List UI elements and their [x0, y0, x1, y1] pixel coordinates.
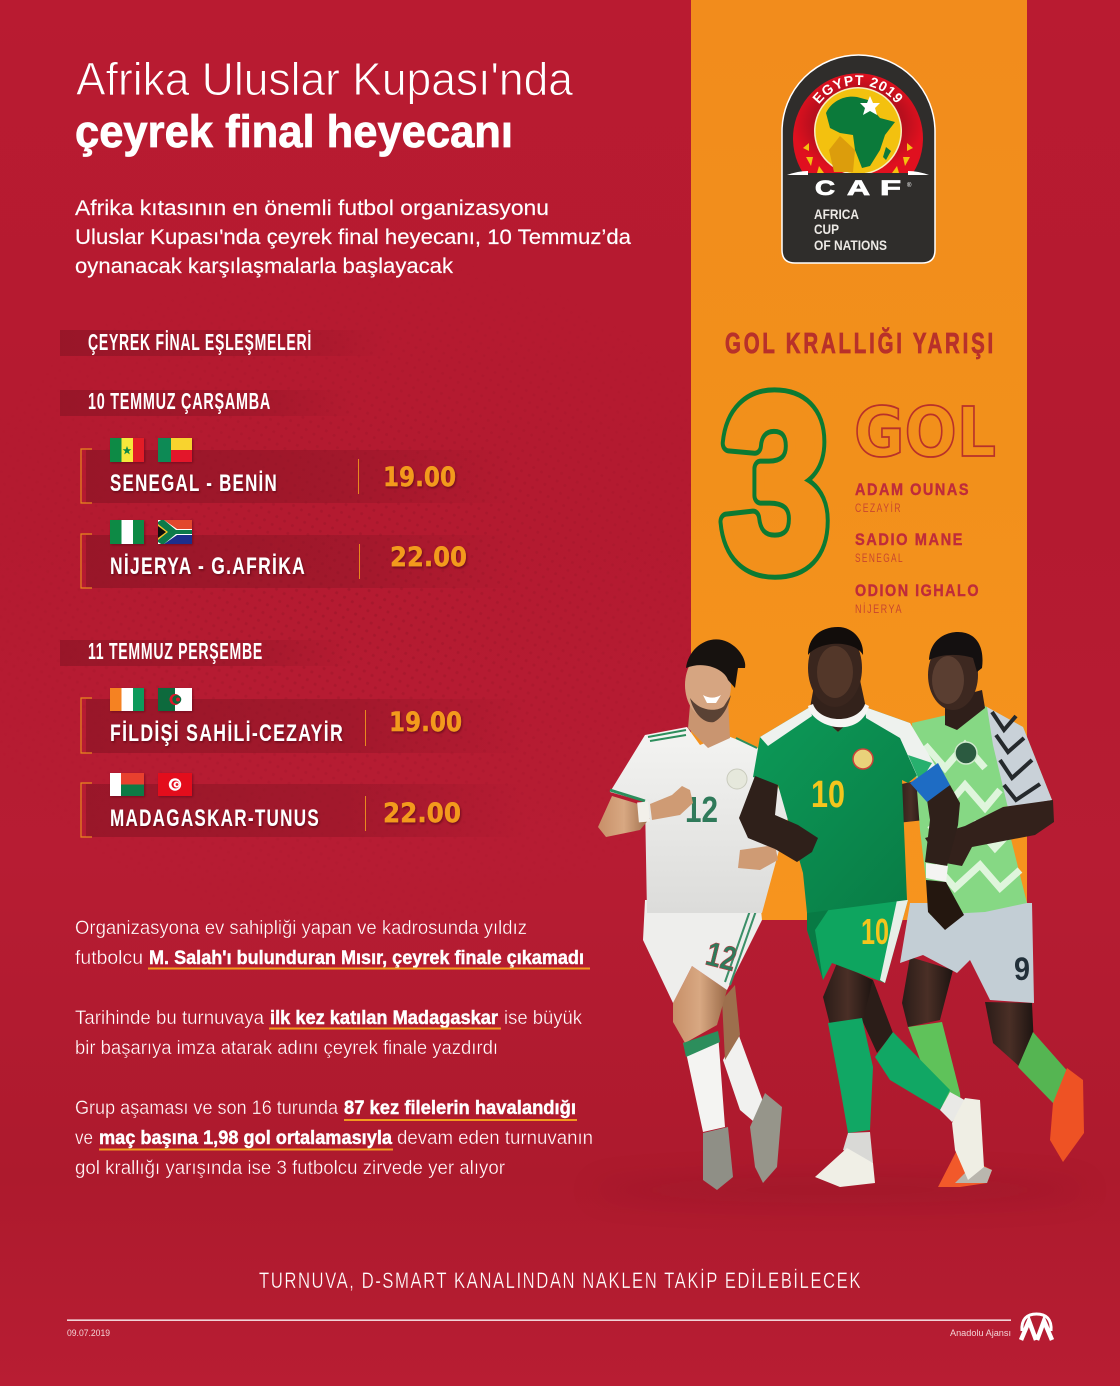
neck [945, 690, 985, 730]
head [928, 640, 978, 710]
title [75, 53, 573, 157]
scorer list: NİJERYA [855, 602, 903, 616]
left leg [902, 957, 953, 1027]
head [808, 629, 862, 707]
arm [598, 796, 650, 837]
scorer list [855, 480, 980, 616]
icon: agency logo [1021, 1314, 1052, 1340]
flag: Ivory Coast [110, 688, 144, 711]
paragraph: goals: 87 kez filelerin havalandığı [344, 1098, 576, 1119]
heading: 10 July: 10 TEMMUZ ÇARŞAMBA [88, 388, 271, 414]
date: 09.07.2019 [67, 1328, 110, 1338]
match: Senegal - Benin [81, 438, 516, 503]
jersey [753, 707, 932, 913]
wrist and hand [637, 802, 650, 822]
logo: Africa Cup of Nations: F [880, 177, 901, 200]
front sock [828, 1018, 873, 1133]
footer rule [67, 1320, 1011, 1321]
front thigh [823, 963, 873, 1025]
logo: Africa Cup of Nations: C [815, 177, 835, 200]
trailing sock [875, 1032, 950, 1110]
agency name: Anadolu Ajansı [950, 1328, 1011, 1338]
neck [688, 700, 730, 748]
panel: orange column [691, 0, 1027, 920]
title: çeyrek final heyecanı [75, 106, 513, 157]
scorer list: ADAM OUNAS [855, 480, 970, 499]
logo: Africa Cup of Nations: CUP [814, 221, 839, 237]
intro text [75, 197, 631, 278]
floor shadow [590, 1176, 1090, 1204]
paragraph: goals: Grup aşaması ve son 16 turunda [75, 1098, 338, 1119]
jersey chevrons [925, 745, 1020, 888]
title: Afrika Uluslar Kupası'nda [76, 53, 573, 105]
flag: Nigeria [110, 520, 144, 544]
paragraph: Madagascar: ise büyük [504, 1008, 582, 1029]
footer note: TURNUVA, D-SMART KANALINDAN NAKLEN TAKİP EDİLEBİLECEK [259, 1268, 862, 1293]
label: GOL: GOL [854, 393, 996, 473]
left arm [739, 776, 818, 862]
wristband [926, 863, 948, 882]
far arm [897, 780, 925, 823]
paragraph: Madagascar: ilk kez katılan Madagaskar [270, 1008, 499, 1029]
right leg [985, 1002, 1034, 1067]
match: Senegal - Benin: SENEGAL - BENİN [110, 470, 278, 497]
paragraph: Egypt: futbolcu [75, 948, 143, 969]
paragraph: Egypt: M. Salah'ı bulunduran Mısır, çeyrek finale çıkamadı [149, 948, 584, 969]
player: Ighalo (Nigeria): 9 [1014, 951, 1030, 987]
player: Mane (Senegal): 10 [811, 774, 845, 816]
near thigh [673, 966, 727, 1043]
logo: Africa Cup of Nations: ® [907, 182, 912, 189]
match: Madagascar - Tunisia [81, 773, 526, 837]
big number 3: 3 [722, 348, 829, 619]
heading: top scorers race: GOL KRALLIĞI YARIŞI [725, 326, 996, 360]
background [0, 360, 1120, 1234]
big number 3: 3 [722, 348, 829, 619]
paragraph: Egypt: Organizasyona ev sahipliği yapan ve kadrosunda yıldız [75, 918, 527, 939]
match: Ivory Coast - Algeria: FİLDİŞİ SAHİLİ-CEZAYİR [110, 720, 344, 747]
paragraph: goals [75, 1098, 593, 1179]
match: Nigeria - South Africa [81, 520, 516, 588]
Africa map [826, 97, 895, 168]
paragraph: Madagascar: Tarihinde bu turnuvaya [75, 1008, 264, 1029]
heading: quarter-final pairings: ÇEYREK FİNAL EŞLEŞMELERİ [88, 329, 312, 355]
far leg [723, 1033, 765, 1127]
player: Mane (Senegal): 10 [861, 911, 889, 952]
match: Madagascar - Tunisia: 22.00 [383, 798, 461, 829]
paragraph: goals: gol krallığı yarışında ise 3 futbolcu zirvede yer alıyor [75, 1158, 506, 1179]
logo: Africa Cup of Nations: OF NATIONS [814, 237, 887, 253]
match: Nigeria - South Africa: 22.00 [390, 542, 467, 573]
paragraph: goals: maç başına 1,98 gol ortalamasıyla [99, 1128, 392, 1149]
player: Ounas (Algeria): 12 [685, 789, 718, 830]
scorer list: CEZAYİR [855, 501, 902, 515]
captain armband [910, 763, 950, 802]
near boot [703, 1127, 733, 1190]
paragraph: goals: ve [75, 1128, 93, 1149]
flag: Benin [158, 438, 192, 462]
right arm [925, 785, 960, 866]
flag: Tunisia [158, 773, 192, 796]
scorer list: ODION IGHALO [855, 581, 980, 600]
player: Mane (Senegal) [739, 627, 984, 1187]
logo: Africa Cup of Nations: EGYPT 2019 [812, 75, 902, 104]
match: Nigeria - South Africa: NİJERYA - G.AFRİKA [110, 553, 306, 580]
intro text: oynanacak karşılaşmalarla başlayacak [75, 255, 454, 278]
flag: Algeria [158, 688, 192, 711]
trailing foot [940, 1092, 970, 1122]
intro text: Uluslar Kupası'nda çeyrek final heyecanı, 10 Temmuz’da [75, 226, 631, 249]
paragraph: goals: devam eden turnuvanın [397, 1128, 593, 1149]
shorts [643, 900, 762, 1003]
match: Madagascar - Tunisia: MADAGASKAR-TUNUS [110, 805, 320, 832]
sleeve [987, 707, 1052, 808]
near sock [683, 1033, 725, 1132]
heading: 11 July: 11 TEMMUZ PERŞEMBE [88, 638, 263, 664]
flag: Senegal [110, 438, 144, 462]
player: Ounas (Algeria): 12 [702, 935, 740, 979]
scorer list: SENEGAL [855, 551, 904, 565]
paragraph: Madagascar [75, 1008, 582, 1059]
paragraph: Egypt [75, 918, 590, 970]
red ring [793, 73, 923, 173]
logo divider [787, 171, 929, 175]
front foot [843, 1132, 873, 1163]
star [860, 96, 880, 115]
shorts [807, 900, 908, 983]
head [685, 652, 731, 718]
neck [810, 680, 866, 732]
arm [925, 800, 1054, 866]
back leg skin [862, 980, 893, 1053]
match: Senegal - Benin: 19.00 [383, 462, 456, 493]
paragraph: Madagascar: bir başarıya imza atarak adını çeyrek finale yazdırdı [75, 1038, 498, 1059]
logo: Africa Cup of Nations: AFRICA [814, 206, 859, 222]
logo: Africa Cup of Nations [781, 54, 936, 264]
shorts [900, 903, 1034, 1003]
match: Ivory Coast - Algeria: 19.00 [389, 707, 462, 738]
hand [926, 880, 964, 930]
logo: Africa Cup of Nations: A [847, 177, 870, 200]
flag: South Africa [158, 520, 192, 544]
flag: Madagascar [110, 773, 144, 796]
scorer list: SADIO MANE [855, 530, 964, 549]
intro text: Afrika kıtasının en önemli futbol organizasyonu [75, 197, 549, 220]
jersey [912, 705, 1052, 915]
jersey [610, 727, 790, 913]
match: Ivory Coast - Algeria [81, 688, 526, 753]
player: Ounas (Algeria) [598, 639, 790, 1190]
ring triangles [803, 143, 913, 173]
player: Ighalo (Nigeria) [897, 632, 1084, 1187]
